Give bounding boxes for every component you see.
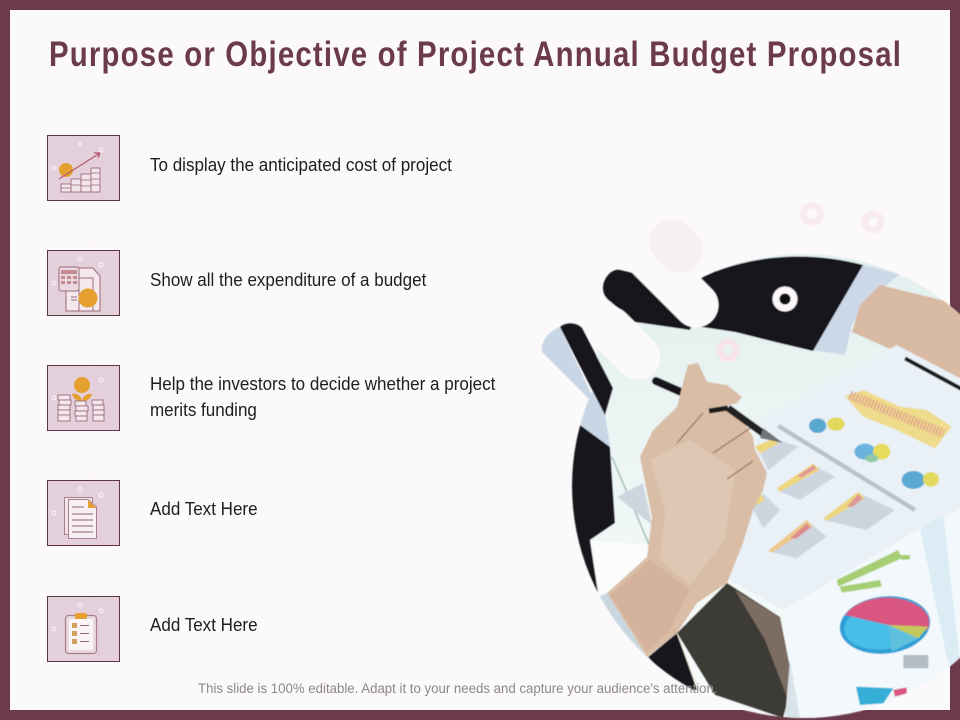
icon: rising coin chart: [47, 135, 120, 201]
lower report paper: [808, 508, 960, 718]
grey divider band: [778, 426, 915, 510]
lower black sleeve: [648, 633, 697, 690]
text: investors: Help the investors to decide whether a project: [150, 373, 495, 394]
decorative pale pill and rings: [672, 206, 881, 358]
small bar charts: [750, 438, 865, 553]
icon: documents: [47, 480, 120, 546]
glass table edge: [612, 457, 650, 547]
icon: calculator and document: [47, 250, 120, 316]
left jacket: [565, 425, 615, 593]
pen back: [656, 381, 690, 396]
text: placeholder one: Add Text Here: [150, 498, 258, 519]
pie charts: [809, 417, 939, 489]
white pills cutting the photo: [610, 259, 696, 357]
left shirt and lapel pill: [542, 323, 613, 415]
pen front: [709, 408, 783, 443]
white desk area: [590, 540, 650, 595]
text: placeholder two: Add Text Here: [150, 614, 258, 635]
title: Purpose or Objective of Project Annual Budget Proposal: [49, 35, 902, 74]
photo circle contents: [560, 250, 960, 720]
dark edge of report: [905, 358, 960, 390]
green bars: [837, 550, 910, 593]
text: expenditure: Show all the expenditure of a budget: [150, 269, 426, 290]
text: anticipated cost: To display the anticipated cost of project: [150, 154, 452, 175]
report text blocks: [750, 438, 895, 558]
photo extension behind lower white pill: [590, 322, 760, 420]
grey paper edge: [617, 483, 652, 525]
photo: hands reviewing budget charts: [541, 202, 960, 719]
icon: money plant and coin stacks: [47, 365, 120, 431]
hand and wrist: [607, 363, 767, 657]
upper cuff: [812, 265, 900, 355]
main report and charts: [727, 345, 960, 720]
legend bars: [903, 655, 928, 668]
text: investors: merits funding: [150, 399, 257, 420]
main report paper: [727, 345, 960, 610]
big pie chart: [839, 596, 931, 654]
dark table reflection: [677, 583, 793, 718]
black pill: [603, 270, 700, 330]
top bar chart: [845, 390, 952, 448]
left shirt lower: [580, 390, 610, 447]
footer note: This slide is 100% editable. Adapt it to your needs and capture your audience's attention.: [198, 681, 718, 696]
bottom teal tab: [856, 687, 893, 705]
text: investors: [150, 373, 496, 420]
upper sleeve: [700, 256, 864, 352]
upper forearm: [852, 285, 960, 385]
lower cuff: [600, 593, 646, 656]
icon: clipboard checklist: [47, 596, 120, 662]
